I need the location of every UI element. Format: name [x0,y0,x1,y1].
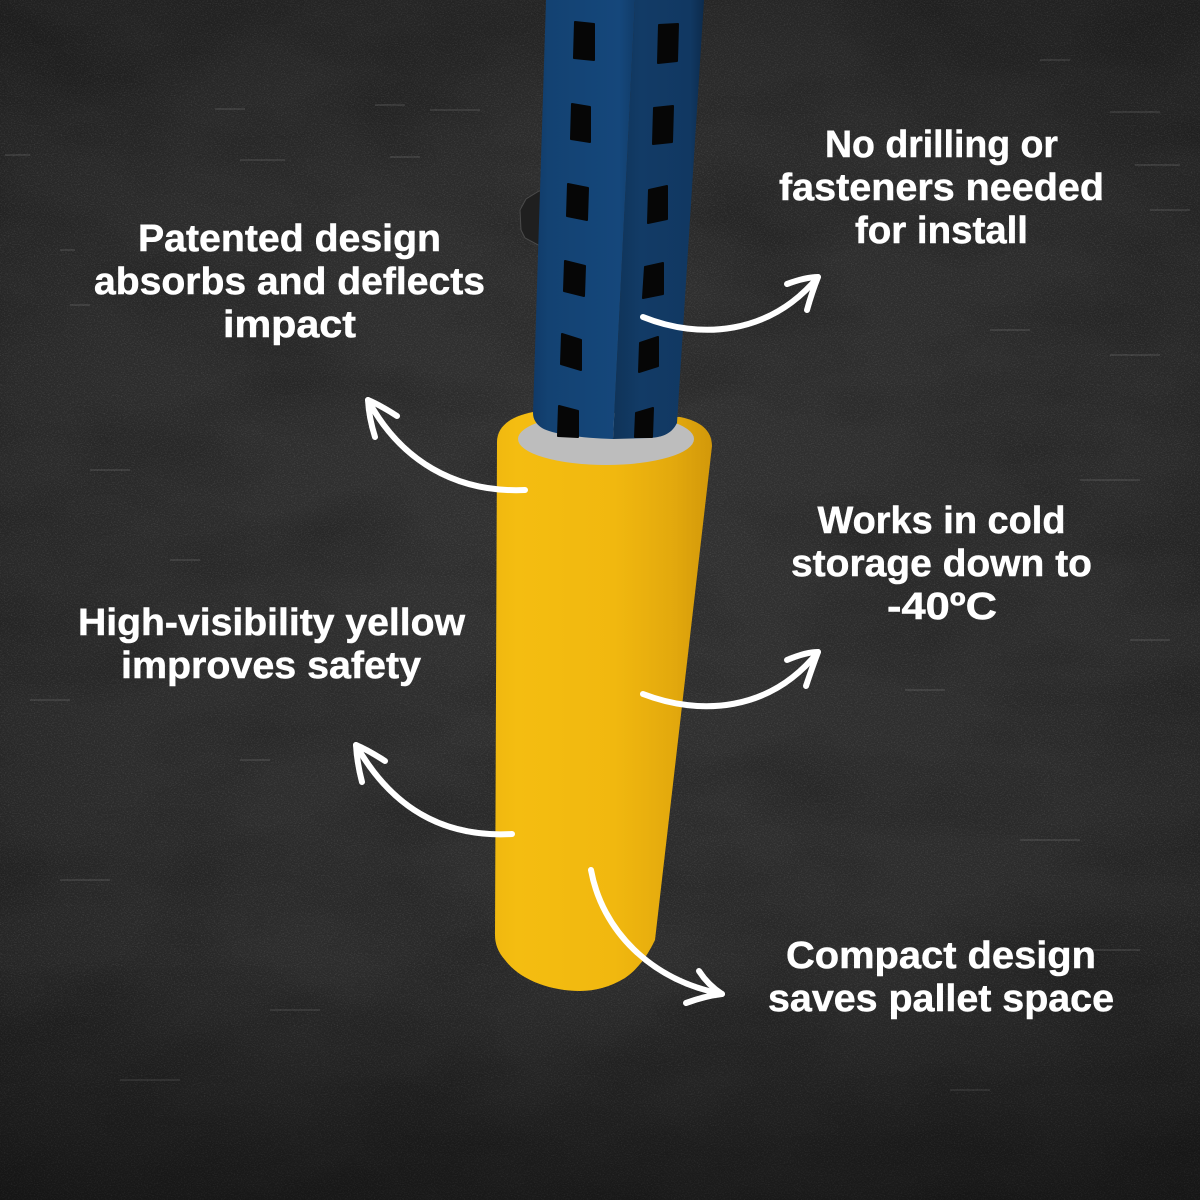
text: high visibility: improves safety [121,645,421,687]
text: compact design [768,935,1114,1020]
post slots [558,22,678,437]
text: high visibility: High-visibility yellow [78,602,465,644]
arrow: patented design [368,400,525,490]
text: patented design: impact [223,304,356,346]
arrow: high visibility [356,745,512,834]
text: compact design: Compact design [786,935,1096,977]
grey inner ring [518,413,694,465]
yellow protector body [495,411,712,991]
arrow: compact design [591,870,722,1003]
arrow: no drilling [643,277,818,330]
text: patented design: Patented design [138,218,441,260]
product: rack post with yellow protector [495,0,712,991]
text: no drilling or fasteners: No drilling or [825,124,1058,166]
text: patented design: absorbs and deflects [94,261,485,303]
text: no drilling or fasteners: fasteners needed [779,167,1104,209]
text: high visibility [78,602,465,687]
text: cold storage [791,500,1092,628]
text: compact design: saves pallet space [768,978,1114,1020]
text: cold storage: -40ºC [887,586,997,628]
text: cold storage: storage down to [791,543,1092,585]
icon: bolt behind post [520,191,545,246]
text: no drilling or fasteners: for install [855,210,1028,252]
blue post [533,0,704,439]
text: cold storage: Works in cold [818,500,1066,542]
text: no drilling or fasteners [779,124,1104,252]
arrow: cold storage [643,652,818,706]
text: patented design [94,218,485,346]
